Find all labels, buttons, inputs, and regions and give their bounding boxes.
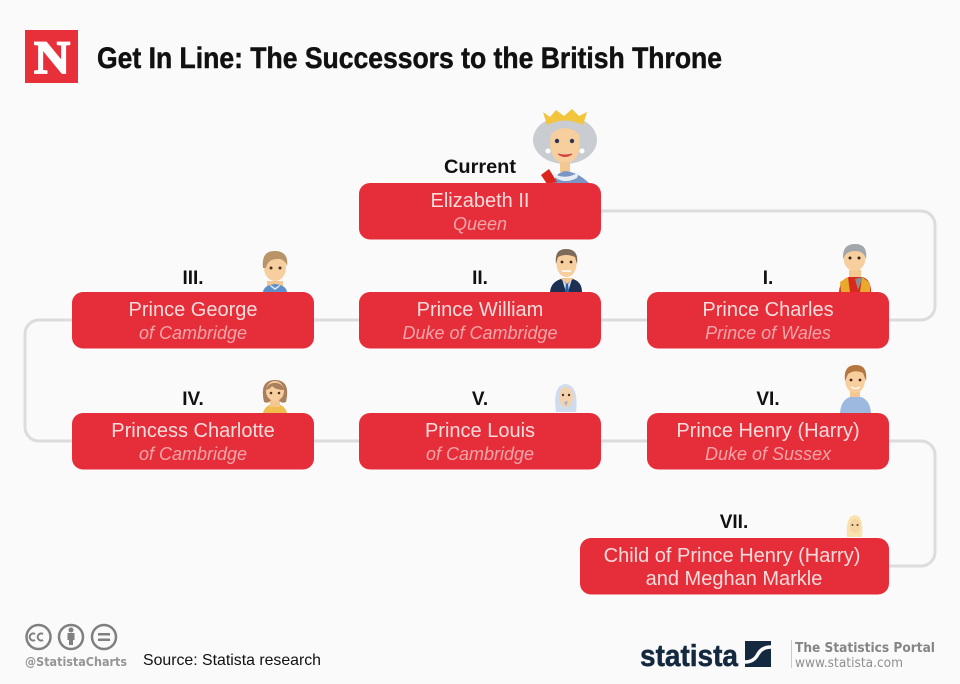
box: Princess Charlotte: Princess Charlotte [111,420,275,442]
icon: Queen Elizabeth II [533,109,597,184]
box: Princess Charlotte: of Cambridge [139,444,247,464]
icon: Prince George [263,251,287,292]
source: Source: Statista research [143,652,321,669]
box: Prince William [359,292,601,348]
icon: Prince William [550,249,582,292]
box: Prince George: Prince George [129,299,257,321]
box: Prince George [72,292,314,348]
box: Elizabeth II: Queen [453,214,507,234]
statista logo: statista [640,638,739,673]
box: Prince Louis: of Cambridge [426,444,534,464]
statista portal text [791,640,935,671]
logo: Newsweek N: N [34,32,70,84]
box: Elizabeth II [359,183,601,240]
label: III.: III. [182,268,204,289]
label: VI.: VI. [756,389,780,410]
box: Prince Charles: Prince Charles [702,299,834,321]
connectors between boxes [25,211,935,566]
box: Princess Charlotte [72,413,314,470]
box: Prince Henry: Prince Henry (Harry) [676,420,860,442]
statista portal text: The Statistics Portal [795,640,935,656]
icon: Prince Harry [840,365,871,413]
icon: child of Prince Harry [847,515,862,537]
label: II.: II. [472,268,488,289]
box: Prince Henry [647,413,889,470]
box: child of Prince Henry and Meghan Markle: and Meghan Markle [646,568,822,590]
label: VII.: VII. [720,512,748,533]
label: Current: Current [444,157,517,178]
box: Prince Henry: Duke of Sussex [705,444,832,464]
icon: Prince Charles [839,244,871,292]
icon: Princess Charlotte [263,380,287,413]
creative commons icons [26,625,116,649]
box: child of Prince Henry and Meghan Markle: Child of Prince Henry (Harry) [604,545,860,567]
box: Prince William: Prince William [417,299,543,321]
box: Prince George: of Cambridge [139,323,247,343]
box: Prince Charles [647,292,889,348]
label: IV.: IV. [182,389,204,410]
box: Elizabeth II: Elizabeth II [431,190,529,212]
icon: Prince Louis [555,384,577,412]
credit: @StatistaCharts: @StatistaCharts [25,654,127,669]
logo: Newsweek N [25,30,78,84]
label: I.: I. [763,268,773,289]
box: child of Prince Henry and Meghan Markle [580,538,889,594]
statista portal text: www.statista.com [795,656,903,671]
box: Prince Louis: Prince Louis [425,420,535,442]
title: Get In Line: The Successors to the British Throne [97,42,722,75]
box: Prince William: Duke of Cambridge [402,323,558,343]
box: Prince Charles: Prince of Wales [705,323,831,343]
label: V.: V. [472,389,488,410]
box: Prince Louis [359,413,601,470]
